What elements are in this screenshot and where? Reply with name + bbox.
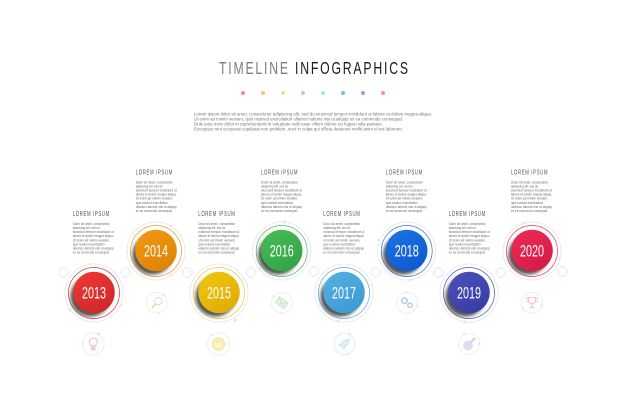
text block 2020: LOREM IPSUM: [511, 169, 548, 177]
text block 2018: Dolor sit amet, consectetur: [386, 179, 423, 184]
intro paragraph: Ut enim ad minim veniam, quis nostrud exercitation ullamco laboris nisi ut aliquip ex ea commodo consequat.: [194, 117, 403, 122]
intro paragraph: Duis aute irure dolor in reprehenderit in voluptate velit esse cillum dolore eu fugiat nulla pariatur.: [194, 122, 383, 127]
text block 2017: adipiscing elit, sed do: [323, 225, 351, 230]
text block 2019: labore et dolore magna aliqua.: [449, 233, 490, 238]
text block 2017: Ut enim ad minim veniam,: [323, 237, 360, 242]
text block 2018: LOREM IPSUM: [386, 169, 422, 177]
text block 2014: labore et dolore magna aliqua.: [136, 192, 177, 197]
button 2014: 2014: [144, 242, 168, 261]
button 2017: [315, 264, 373, 323]
title: [219, 59, 408, 79]
text block 2014: quis nostrud exercitation: [136, 200, 168, 205]
text block 2019: Ut enim ad minim veniam,: [449, 237, 486, 242]
text block 2015: LOREM IPSUM: [198, 211, 235, 218]
text block 2014: [136, 169, 177, 213]
text block 2015: quis nostrud exercitation: [198, 241, 230, 246]
text block 2019: ullamco laboris nisi ut aliquip: [449, 246, 490, 251]
icon: gears: [396, 291, 418, 313]
text block 2016: Dolor sit amet, consectetur: [261, 179, 299, 184]
text block 2013: Ut enim ad minim veniam,: [73, 237, 110, 242]
text block 2015: Dolor sit amet, consectetur: [198, 221, 236, 226]
text block 2015: Ut enim ad minim veniam,: [198, 237, 235, 242]
text block 2016: eiusmod tempor incididunt ut: [261, 187, 303, 192]
text block 2014: ullamco laboris nisi ut aliquip: [136, 204, 177, 209]
text block 2017: [323, 211, 365, 255]
text block 2019: ex ea commodo consequat.: [449, 250, 486, 255]
step: 2013: [65, 211, 123, 355]
button 2020: [503, 222, 561, 280]
text block 2016: quis nostrud exercitation: [261, 200, 293, 205]
text block 2020: Dolor sit amet, consectetur: [511, 179, 549, 184]
text block 2013: [73, 211, 114, 255]
text block 2013: Dolor sit amet, consectetur: [73, 221, 110, 226]
text block 2018: eiusmod tempor incididunt ut: [386, 187, 427, 192]
text block 2015: ullamco laboris nisi ut aliquip: [198, 246, 240, 251]
step: 2015: [190, 211, 248, 355]
button 2018: 2018: [395, 242, 419, 261]
button 2019: [440, 264, 498, 324]
text block 2015: labore et dolore magna aliqua.: [198, 233, 239, 238]
text block 2018: ex ea commodo consequat.: [386, 208, 423, 213]
text block 2020: ullamco laboris nisi ut aliquip: [511, 204, 553, 209]
button 2015: 2015: [207, 284, 231, 303]
intro paragraph: Excepteur sint occaecat cupidatat non proident, sunt in culpa qui officia deserunt mollit anim id est laborum.: [194, 127, 403, 132]
text block 2017: ex ea commodo consequat.: [323, 250, 360, 255]
title: TIMELINE: [219, 59, 288, 79]
text block 2014: ex ea commodo consequat.: [136, 208, 173, 213]
text block 2018: Ut enim ad minim veniam,: [386, 196, 423, 201]
text block 2015: adipiscing elit, sed do: [198, 225, 226, 230]
step: 2014: [126, 169, 185, 314]
title: INFOGRAPHICS: [295, 59, 408, 79]
text block 2019: quis nostrud exercitation: [449, 241, 481, 246]
step: 2019: [440, 211, 498, 354]
text block 2018: [386, 169, 427, 213]
text block 2016: LOREM IPSUM: [261, 169, 298, 177]
text block 2015: eiusmod tempor incididunt ut: [198, 229, 240, 234]
text block 2014: Dolor sit amet, consectetur: [136, 179, 173, 184]
text block 2017: ullamco laboris nisi ut aliquip: [323, 246, 365, 251]
button 2020: 2020: [520, 242, 544, 261]
text block 2020: adipiscing elit, sed do: [511, 183, 539, 188]
connector rings between steps: [58, 266, 568, 278]
text block 2016: [261, 169, 303, 213]
button 2015: [190, 264, 248, 322]
text block 2016: ex ea commodo consequat.: [261, 208, 298, 213]
button 2013: [65, 263, 123, 322]
text block 2017: Dolor sit amet, consectetur: [323, 221, 361, 226]
text block 2018: labore et dolore magna aliqua.: [386, 192, 427, 197]
button 2017: 2017: [332, 284, 356, 303]
icon: target badge: [208, 333, 230, 355]
text block 2013: ex ea commodo consequat.: [73, 250, 110, 255]
text block 2014: LOREM IPSUM: [136, 169, 172, 177]
text block 2016: Ut enim ad minim veniam,: [261, 196, 298, 201]
icon: flask: [458, 333, 481, 354]
step: 2016: [253, 169, 311, 315]
step: 2017: [315, 211, 373, 355]
text block 2019: adipiscing elit, sed do: [449, 225, 476, 230]
button 2018: [378, 222, 436, 282]
intro paragraph: [194, 112, 432, 132]
text block 2016: labore et dolore magna aliqua.: [261, 192, 302, 197]
icon: light bulb: [82, 332, 104, 355]
text block 2020: eiusmod tempor incididunt ut: [511, 187, 553, 192]
step: 2018: [378, 169, 436, 313]
icon: magnifier: [146, 292, 167, 314]
text block 2019: [449, 211, 490, 255]
button 2016: [253, 220, 311, 280]
text block 2017: quis nostrud exercitation: [323, 241, 355, 246]
step: 2020: [503, 169, 561, 313]
icon: trophy: [522, 292, 543, 313]
text block 2013: quis nostrud exercitation: [73, 241, 105, 246]
icon: rocket: [334, 333, 355, 355]
text block 2014: adipiscing elit, sed do: [136, 183, 163, 188]
button 2016: 2016: [270, 242, 294, 261]
text block 2013: labore et dolore magna aliqua.: [73, 233, 114, 238]
text block 2020: Ut enim ad minim veniam,: [511, 196, 548, 201]
text block 2018: adipiscing elit, sed do: [386, 183, 413, 188]
text block 2015: [198, 211, 240, 255]
text block 2017: labore et dolore magna aliqua.: [323, 233, 364, 238]
text block 2019: Dolor sit amet, consectetur: [449, 221, 486, 226]
text block 2018: ullamco laboris nisi ut aliquip: [386, 204, 427, 209]
text block 2017: eiusmod tempor incididunt ut: [323, 229, 365, 234]
button 2014: [126, 222, 185, 280]
text block 2013: adipiscing elit, sed do: [73, 225, 100, 230]
icon: envelope: [271, 292, 292, 315]
text block 2020: [511, 169, 553, 213]
row of coloured dots: [241, 91, 385, 95]
text block 2017: LOREM IPSUM: [323, 211, 360, 218]
text block 2019: LOREM IPSUM: [449, 211, 485, 218]
text block 2019: eiusmod tempor incididunt ut: [449, 229, 490, 234]
button 2019: 2019: [457, 284, 481, 303]
text block 2014: Ut enim ad minim veniam,: [136, 196, 173, 201]
text block 2020: ex ea commodo consequat.: [511, 208, 548, 213]
text block 2016: adipiscing elit, sed do: [261, 183, 289, 188]
text block 2020: quis nostrud exercitation: [511, 200, 543, 205]
text block 2016: ullamco laboris nisi ut aliquip: [261, 204, 303, 209]
text block 2020: labore et dolore magna aliqua.: [511, 192, 552, 197]
text block 2013: eiusmod tempor incididunt ut: [73, 229, 114, 234]
text block 2014: eiusmod tempor incididunt ut: [136, 187, 177, 192]
text block 2013: ullamco laboris nisi ut aliquip: [73, 246, 114, 251]
intro paragraph: Lorem ipsum dolor sit amet, consectetur adipiscing elit, sed do eiusmod tempor incididunt ut labore et dolore magna aliqua.: [194, 112, 432, 117]
text block 2015: ex ea commodo consequat.: [198, 250, 235, 255]
text block 2013: LOREM IPSUM: [73, 211, 109, 218]
text block 2018: quis nostrud exercitation: [386, 200, 418, 205]
button 2013: 2013: [82, 284, 106, 303]
